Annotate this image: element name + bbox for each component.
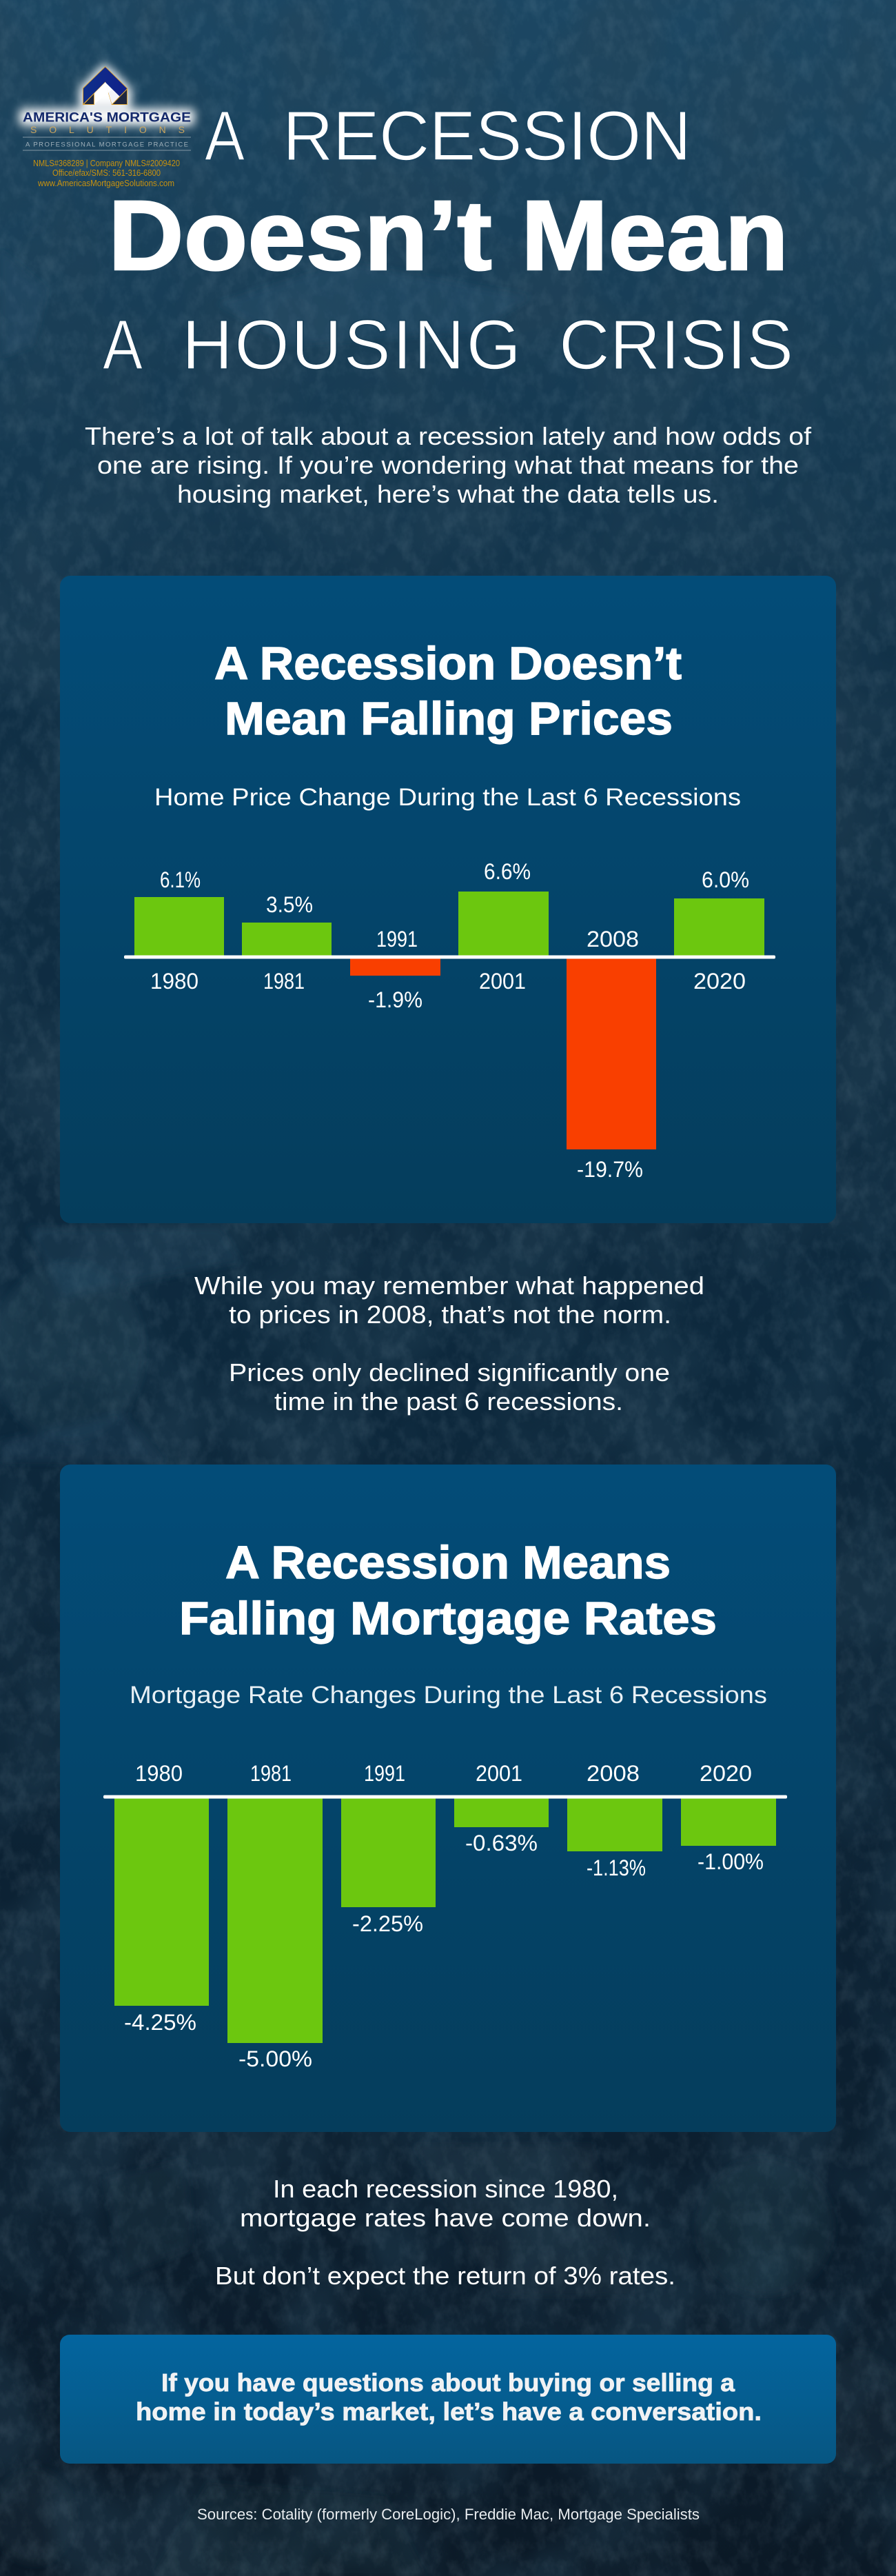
icon: house roof bbox=[83, 67, 128, 105]
text block: rates have come down: But don’t expect the return of 3% rates. bbox=[215, 2262, 675, 2290]
bar chart: home price change: 6.0% bbox=[702, 867, 749, 892]
logo: America's Mortgage Solutions bbox=[19, 63, 194, 188]
bar chart: mortgage rate change: -5.00% bbox=[238, 2046, 312, 2071]
panel: home prices bbox=[60, 576, 836, 1223]
bar chart: home price change: 6.6% bbox=[484, 859, 531, 884]
title: A bbox=[205, 97, 245, 175]
bar chart: mortgage rate change: 2001 bbox=[476, 1761, 522, 1786]
bar chart: mortgage rate change: 1980 bbox=[135, 1761, 183, 1786]
bar chart: home price change: 6.1% bbox=[160, 867, 201, 892]
logo: America's Mortgage Solutions: Office/efax/SMS: 561-316-6800 bbox=[52, 168, 161, 178]
bar chart: mortgage rate change: 2020 bbox=[700, 1761, 752, 1786]
bar chart: mortgage rate change: -1.13% bbox=[587, 1855, 646, 1880]
panel: mortgage rates bbox=[60, 1465, 836, 2132]
logo: America's Mortgage Solutions: NMLS#368289 | Company NMLS#2009420 bbox=[33, 158, 180, 168]
intro text bbox=[85, 422, 812, 508]
bar chart: mortgage rate change: -1.00% bbox=[698, 1849, 764, 1874]
bar chart: mortgage rate change: 1991 bbox=[364, 1761, 405, 1786]
panel heading: Falling Mortgage Rates bbox=[179, 1593, 717, 1644]
panel heading: A Recession Doesn’t bbox=[214, 638, 682, 690]
bar chart: mortgage rate change: -4.25% bbox=[124, 2010, 196, 2035]
sources: Sources: Cotality (formerly CoreLogic), Freddie Mac, Mortgage Specialists bbox=[197, 2506, 700, 2523]
panel heading bbox=[179, 1537, 717, 1644]
panel heading bbox=[214, 638, 682, 745]
bar chart: mortgage rate change: -2.25% bbox=[352, 1911, 423, 1936]
panel heading: Mean Falling Prices bbox=[225, 693, 673, 745]
panel heading: A Recession Means bbox=[225, 1537, 671, 1589]
chart subtitle: Mortgage Rate Changes During the Last 6 Recessions bbox=[130, 1682, 767, 1709]
callout: call to action: home in today’s market, let’s have a conversation. bbox=[136, 2397, 762, 2426]
title: CRISIS bbox=[559, 305, 793, 384]
bar chart: mortgage rate change bbox=[103, 1761, 787, 2071]
text block: rates have come down: In each recession since 1980, bbox=[273, 2175, 618, 2203]
intro text: housing market, here’s what the data tells us. bbox=[177, 480, 719, 508]
bar chart: mortgage rate change: 2008 bbox=[587, 1761, 640, 1786]
title: RECESSION bbox=[283, 97, 691, 175]
intro text: one are rising. If you’re wondering what that means for the bbox=[97, 451, 799, 479]
text block: rates have come down: mortgage rates have come down. bbox=[240, 2204, 651, 2232]
text block: rates have come down bbox=[215, 2175, 675, 2290]
logo: America's Mortgage Solutions: A PROFESSIONAL MORTGAGE PRACTICE bbox=[26, 141, 188, 149]
chart subtitle: Home Price Change During the Last 6 Recessions bbox=[154, 784, 741, 811]
bar chart: home price change: 3.5% bbox=[266, 892, 313, 917]
callout: call to action bbox=[60, 2335, 836, 2464]
callout: call to action: If you have questions about buying or selling a bbox=[161, 2368, 735, 2397]
bar chart: home price change: -19.7% bbox=[577, 1157, 643, 1182]
text block: 2008 is not the norm: time in the past 6 recessions. bbox=[274, 1387, 623, 1416]
intro text: There’s a lot of talk about a recession lately and how odds of bbox=[85, 422, 812, 450]
text block: 2008 is not the norm: Prices only declined significantly one bbox=[229, 1358, 670, 1387]
logo: America's Mortgage Solutions: AMERICA'S MORTGAGE bbox=[23, 110, 191, 125]
bar chart: mortgage rate change: -0.63% bbox=[465, 1831, 538, 1855]
text block: 2008 is not the norm bbox=[194, 1271, 704, 1416]
title: Doesn’t Mean bbox=[108, 180, 788, 291]
bar chart: home price change: 2008 bbox=[587, 927, 639, 952]
bar chart: home price change: 1981 bbox=[263, 969, 305, 994]
logo: America's Mortgage Solutions: www.AmericasMortgageSolutions.com bbox=[37, 178, 174, 188]
title: A bbox=[103, 305, 143, 384]
text block: 2008 is not the norm: While you may remember what happened bbox=[194, 1271, 704, 1300]
bar chart: home price change: 1991 bbox=[376, 927, 418, 952]
bar chart: home price change bbox=[124, 859, 775, 1182]
bar chart: mortgage rate change: 1981 bbox=[250, 1761, 292, 1786]
bar chart: home price change: 2001 bbox=[479, 969, 526, 994]
title: HOUSING bbox=[182, 305, 521, 384]
bar chart: home price change: 1980 bbox=[150, 969, 198, 994]
text block: 2008 is not the norm: to prices in 2008, that’s not the norm. bbox=[229, 1300, 671, 1329]
bar chart: home price change: 2020 bbox=[693, 969, 746, 994]
bar chart: home price change: -1.9% bbox=[368, 987, 422, 1012]
logo: America's Mortgage Solutions: SOLUTIONS bbox=[30, 124, 185, 135]
title bbox=[103, 97, 793, 384]
